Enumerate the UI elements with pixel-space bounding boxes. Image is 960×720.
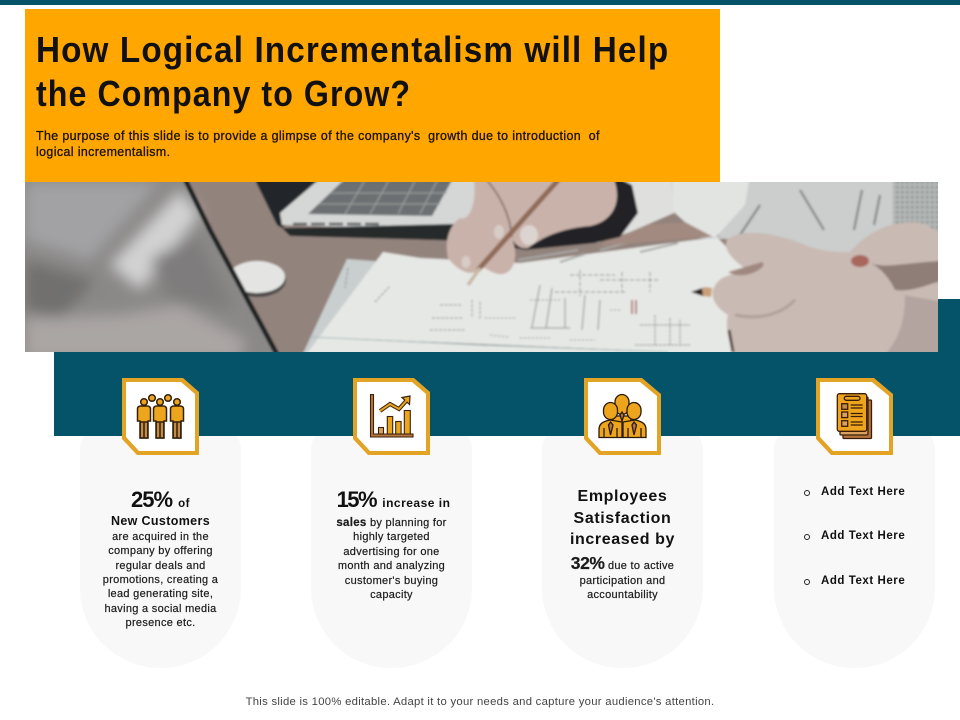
32% with body text: 32% due to active: [571, 553, 674, 573]
right hand: [713, 222, 960, 360]
brown shadow under cuff: [600, 222, 720, 246]
body text: [336, 516, 447, 601]
card 3: employee satisfaction: [542, 425, 703, 668]
cuff: [590, 175, 676, 243]
subtitle: The purpose of this slide is to provide a glimpse of the company's growth due to introduction of: [36, 129, 600, 143]
employees satisfaction heading: Satisfaction: [574, 510, 671, 526]
pencil tip: [691, 287, 712, 297]
icon: checklist documents: [816, 378, 893, 455]
icon: people group: [122, 378, 199, 455]
title: the Company to Grow?: [36, 73, 411, 114]
32% with body text: [571, 553, 674, 601]
bullet 3: Add Text Here: [821, 575, 905, 587]
body text: presence etc.: [126, 617, 195, 629]
handwriting: [345, 242, 690, 346]
body text: are acquired in the: [112, 531, 209, 543]
bullet marker 1: [804, 490, 810, 496]
body text: having a social media: [104, 603, 217, 615]
bullet 1: Add Text Here: [821, 486, 905, 498]
card 1: new customers: [80, 425, 241, 668]
body text: promotions, creating a: [103, 574, 218, 586]
employees satisfaction heading: [570, 488, 675, 548]
pencil: [478, 178, 560, 270]
footer note: This slide is 100% editable. Adapt it to your needs and capture your audience's attention.: [246, 696, 714, 708]
body text: advertising for one: [343, 546, 440, 558]
body text: company by offering: [108, 545, 213, 557]
25% of heading: 25% of: [131, 487, 190, 512]
card 4: add text: [774, 425, 935, 668]
text: card 2: [336, 487, 450, 601]
teal band overlap covering card tops: [54, 399, 960, 436]
body text: regular deals and: [115, 560, 206, 572]
laptop screen edge: [183, 175, 278, 356]
bullet 2: Add Text Here: [821, 530, 905, 542]
mouse: [230, 263, 286, 297]
employees satisfaction heading: Employees: [578, 488, 667, 505]
laptop body: [250, 170, 335, 228]
text: card 1: [103, 487, 218, 629]
body text: capacity: [370, 589, 413, 601]
icon: growth chart: [353, 378, 430, 455]
title: How Logical Incrementalism will Help: [36, 29, 669, 70]
icon: team of three: [584, 378, 661, 455]
body text: highly targeted: [353, 531, 430, 543]
title panel: [25, 9, 720, 182]
15% increase heading: 15% increase in: [337, 487, 450, 512]
text: card 4 bullets: [804, 486, 905, 587]
bullet marker 2: [804, 534, 810, 540]
blurred foreground laptop screen: [0, 170, 277, 360]
New Customers: New Customers: [111, 514, 210, 528]
title: [36, 29, 669, 114]
bullet marker 3: [804, 579, 810, 585]
employees satisfaction heading: increased by: [570, 531, 675, 548]
desk: [0, 160, 960, 375]
photo: hands working on paper at a desk with laptops: [25, 182, 938, 352]
subtitle: [36, 129, 600, 159]
body text: [103, 531, 218, 629]
paper sheets: [300, 259, 385, 360]
text: card 3: [570, 488, 675, 601]
card 2: sales: [311, 425, 472, 668]
body text: lead generating site,: [108, 588, 213, 600]
body text: customer's buying: [345, 575, 438, 587]
32% with body text: accountability: [587, 589, 658, 601]
teal band behind photo: [54, 299, 960, 436]
top teal bar: [0, 0, 960, 5]
body text: month and analyzing: [338, 560, 445, 572]
left hand with pencil: [447, 175, 617, 274]
subtitle: logical incrementalism.: [36, 145, 170, 159]
body text: sales by planning for: [336, 517, 447, 529]
shirt: [660, 170, 960, 258]
32% with body text: participation and: [580, 575, 665, 587]
